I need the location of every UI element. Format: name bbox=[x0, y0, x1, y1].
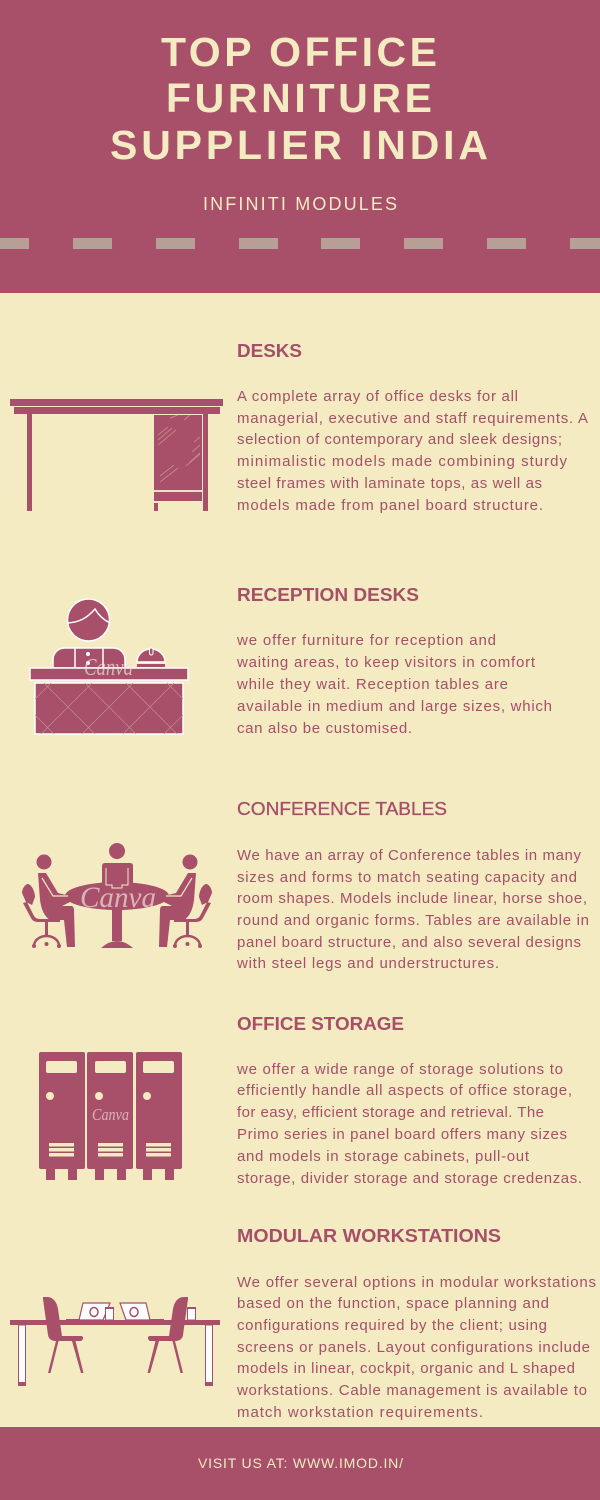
watermark: Canva bbox=[84, 655, 133, 681]
dashed divider bbox=[0, 238, 600, 249]
header banner bbox=[0, 0, 600, 293]
description: workstations. Cable management is available to bbox=[236, 1382, 587, 1399]
description: and models in storage cabinets, pull-out bbox=[237, 1148, 530, 1165]
icon: office desk bbox=[10, 399, 223, 511]
description: steel frames with laminate tops, as well as bbox=[237, 475, 542, 492]
icon: storage lockers bbox=[39, 1052, 182, 1180]
description: minimalistic models made combining sturdy bbox=[237, 453, 568, 470]
description: match workstation requirements. bbox=[237, 1404, 483, 1421]
description: available in medium and large sizes, which bbox=[237, 698, 552, 715]
subtitle: INFINITI MODULES bbox=[203, 194, 397, 214]
panel: modular workstations bbox=[10, 1225, 596, 1421]
description: waiting areas, to keep visitors in comfort bbox=[236, 654, 536, 671]
description bbox=[236, 1061, 582, 1187]
description: models made from panel board structure. bbox=[237, 497, 543, 514]
description: round and organic forms. Tables are available in bbox=[237, 912, 589, 929]
heading: CONFERENCE TABLES bbox=[237, 798, 447, 819]
heading: DESKS bbox=[237, 340, 302, 361]
description bbox=[236, 1274, 596, 1421]
title: SUPPLIER INDIA bbox=[110, 122, 488, 168]
panel: conference tables bbox=[22, 798, 589, 972]
heading: MODULAR WORKSTATIONS bbox=[237, 1225, 501, 1246]
description: with steel legs and understructures. bbox=[236, 955, 499, 972]
description: panel board structure, and also several designs bbox=[237, 934, 581, 951]
icon: shared workstation with chairs bbox=[10, 1297, 220, 1386]
description bbox=[237, 388, 588, 514]
description: can also be customised. bbox=[237, 720, 412, 737]
watermark: Canva bbox=[92, 1105, 129, 1124]
description: managerial, executive and staff requirements. A bbox=[237, 410, 588, 427]
icon: people around conference table bbox=[22, 843, 212, 948]
description: screens or panels. Layout configurations include bbox=[237, 1339, 590, 1356]
description: We offer several options in modular workstations bbox=[237, 1274, 596, 1291]
footer link text: VISIT US AT: WWW.IMOD.IN/ bbox=[198, 1455, 403, 1471]
footer bbox=[0, 1427, 600, 1500]
title: TOP OFFICE bbox=[161, 29, 437, 75]
description: Primo series in panel board offers many sizes bbox=[237, 1126, 567, 1143]
right person bbox=[159, 854, 212, 948]
description: sizes and forms to match seating capacity and bbox=[237, 869, 577, 886]
panel: office storage bbox=[39, 1013, 582, 1187]
description: based on the function, space planning and bbox=[237, 1295, 549, 1312]
heading: RECEPTION DESKS bbox=[237, 584, 419, 605]
description: selection of contemporary and sleek designs; bbox=[237, 431, 562, 448]
title bbox=[110, 29, 488, 168]
description bbox=[236, 847, 589, 972]
description: models in linear, cockpit, organic and L shaped bbox=[237, 1360, 575, 1377]
description: room shapes. Models include linear, horse shoe, bbox=[237, 890, 587, 907]
description: A complete array of office desks for all bbox=[237, 388, 518, 405]
description: for easy, efficient storage and retrieval. The bbox=[237, 1104, 544, 1121]
icon: receptionist at desk bbox=[30, 599, 188, 734]
description: we offer a wide range of storage solutions to bbox=[236, 1061, 563, 1078]
description: configurations required by the client; using bbox=[237, 1317, 547, 1334]
panel: reception desks bbox=[30, 584, 552, 737]
description: we offer furniture for reception and bbox=[236, 632, 496, 649]
description: We have an array of Conference tables in many bbox=[237, 847, 582, 864]
description: while they wait. Reception tables are bbox=[236, 676, 508, 693]
heading: OFFICE STORAGE bbox=[237, 1013, 404, 1034]
watermark: Canva bbox=[80, 881, 156, 914]
description bbox=[236, 632, 552, 737]
description: storage, divider storage and storage credenzas. bbox=[237, 1170, 582, 1187]
title: FURNITURE bbox=[166, 75, 432, 121]
panel: desks bbox=[10, 340, 588, 514]
description: efficiently handle all aspects of office storage, bbox=[237, 1082, 572, 1099]
left person bbox=[22, 854, 75, 948]
